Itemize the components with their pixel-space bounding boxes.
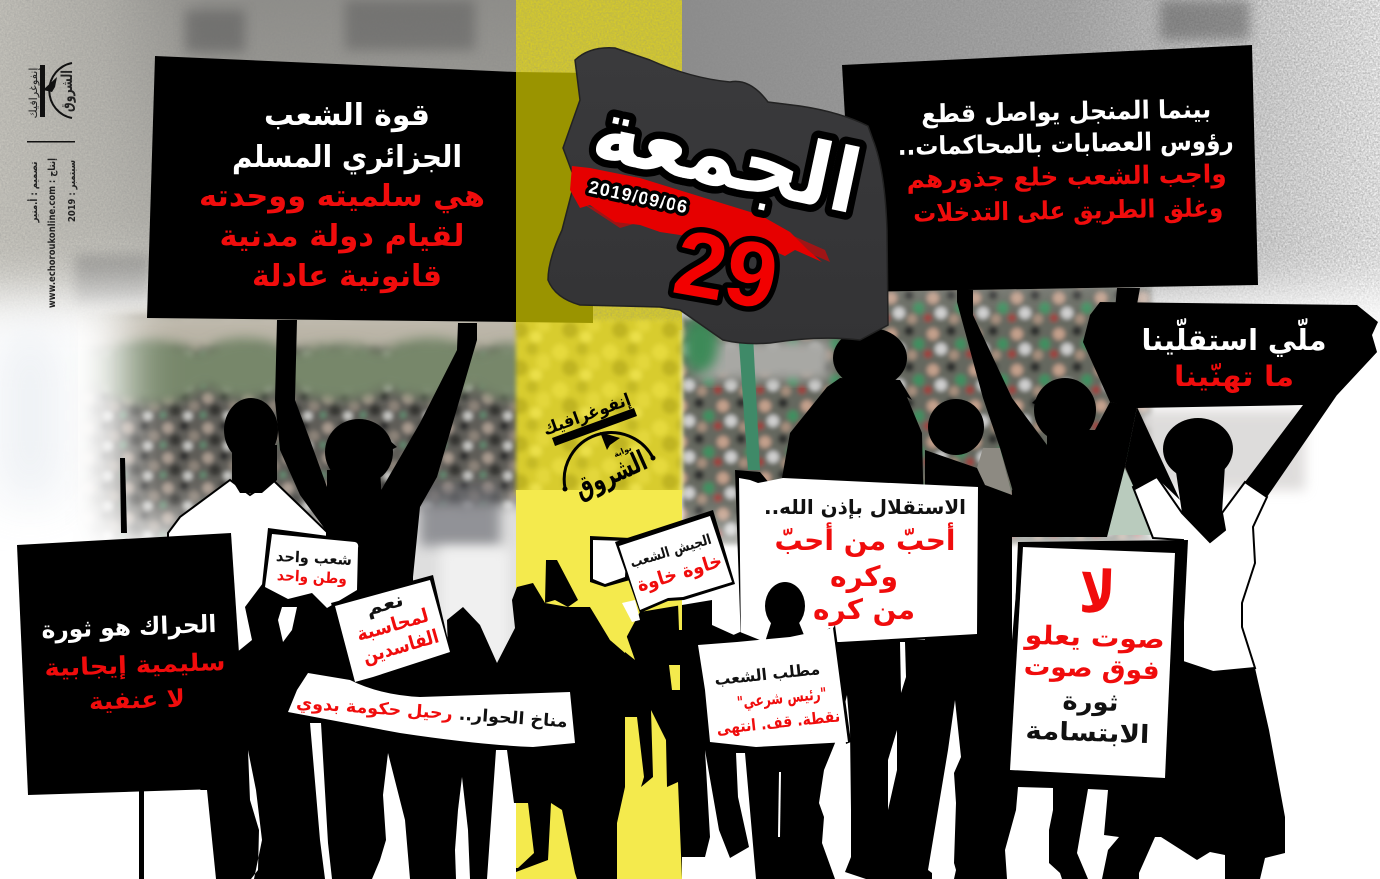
logo: centre infographic mark: إنفوغرافيك: [540, 390, 634, 440]
sign: independence by God's will: [735, 470, 978, 645]
sign: No voice above the voice: لا: [1078, 558, 1117, 627]
second head and body: [925, 399, 1012, 640]
date: 2019/09/06: [587, 177, 689, 217]
sign: No voice above the voice: ثورة: [1062, 686, 1119, 718]
side logo: إنفوغرافيك: [27, 68, 40, 118]
pole below board: [139, 788, 144, 879]
sign: army people brothers: خاوة خاوة: [634, 550, 725, 596]
sign: army people brothers: [590, 510, 735, 613]
scarf text: ملّي استقلّينا: [1142, 319, 1326, 357]
side logo: [27, 63, 76, 118]
yellow vertical band: [516, 0, 682, 879]
sign: yes to corrupt accountability: لمحاسبة: [354, 604, 431, 646]
sign: one people one nation: وطن واحد: [277, 566, 347, 588]
sign: No voice above the voice: فوق صوت: [1023, 652, 1160, 686]
logo: centre infographic mark: [540, 390, 656, 505]
panel: flag with event title: [548, 48, 888, 344]
background photo: buildings and crowd: [0, 0, 1380, 662]
sign: No voice above the voice: [1008, 540, 1188, 787]
white text block: رؤوس العصابات بالمحاكمات..: [897, 126, 1234, 162]
banner: dialogue climate: [288, 673, 575, 747]
red text block: واجب الشعب خلع جذورهم: [906, 159, 1227, 195]
flag pole: [737, 315, 760, 470]
red brush stroke: [570, 166, 830, 262]
white text block: [897, 94, 1234, 162]
panel: left top protest board: [147, 56, 593, 323]
logo: centre infographic mark: بوابة: [612, 443, 633, 459]
panel: bottom left black board: سليمية إيجابية: [44, 648, 226, 682]
white text block: بينما المنجل يواصل قطع: [921, 94, 1211, 130]
man in white shirt: [168, 398, 327, 665]
sign: independence by God's will: من كره: [813, 593, 915, 626]
sign: independence by God's will: وكره: [830, 560, 898, 593]
silhouettes: right group of protesters: [625, 288, 1377, 879]
red text block: [199, 179, 485, 294]
sign: No voice above the voice: صوت يعلو: [1022, 621, 1165, 656]
tall man centre right: [782, 328, 925, 520]
sign: yes to corrupt accountability: نعم: [363, 589, 406, 620]
sign pole: [120, 458, 127, 533]
man with cap raising arms: [275, 320, 477, 640]
sign: yes to corrupt accountability: [331, 575, 451, 684]
date credit: سبتمبر : 2019: [67, 160, 78, 222]
man with raised arms and cap: [957, 288, 1140, 537]
woman with white shirt: [1125, 352, 1377, 672]
credits column: [27, 63, 78, 308]
crowd mass bottom right: [625, 545, 1285, 879]
heading: people strength: الجزائري المسلم: [232, 140, 462, 175]
crowd mass bottom left: [200, 583, 640, 879]
yellow gaps between figures: [516, 590, 682, 879]
designer credit: تصميم : أ.منير: [27, 161, 40, 223]
white gaps between legs: [144, 600, 1225, 879]
number 29: 29: [667, 211, 785, 329]
scarf text: ما تهنّينا: [1174, 360, 1294, 393]
sign: people's demand with figure: [698, 582, 851, 747]
sign: people's demand with figure: مطلب الشعب: [714, 659, 821, 689]
side logo: الشروق: [58, 70, 76, 112]
panel: bottom left black board: الحراك هو ثورة: [41, 610, 217, 644]
red text block: لقيام دولة مدنية: [220, 219, 464, 254]
panel: scarf banner: [1083, 302, 1378, 408]
sign: yes to corrupt accountability: الفاسدين: [360, 625, 441, 668]
red text block: [906, 159, 1227, 229]
sign: independence by God's will: الاستقلال بإذن الله..: [764, 495, 966, 519]
title: الجمعة: [584, 77, 870, 234]
logo: centre infographic mark: الشروق: [569, 444, 652, 505]
sign: army people brothers: الجيش الشعب: [628, 532, 713, 572]
sign: people's demand with figure: "رئيس شرعي": [736, 684, 828, 713]
divider: [27, 141, 75, 142]
sign: independence by God's will: أحبّ من أحبّ: [774, 522, 956, 557]
silhouettes: left group of protesters: [120, 320, 640, 879]
heading: people strength: [232, 98, 462, 175]
banner: dialogue climate: مناخ الحوار.. رحيل حكومة بدوي: [296, 693, 568, 732]
panel: right top protest board: [842, 45, 1258, 292]
red text block: هي سلميته ووحدته: [199, 179, 485, 214]
panel: bottom left black board: لا عنفية: [88, 684, 185, 716]
red text block: وغلق الطريق على التدخلات: [913, 193, 1223, 229]
sign: one people one nation: [262, 528, 358, 608]
flag shape: [548, 48, 888, 344]
sign: No voice above the voice: الابتسامة: [1025, 716, 1150, 749]
scarf text: [1142, 319, 1326, 393]
website credit: إنتاج : www.echoroukonline.com: [47, 158, 58, 308]
sign: people's demand with figure: نقطة. قف. انتهى: [716, 706, 841, 738]
panel: bottom left black board: [17, 533, 248, 795]
heading: people strength: قوة الشعب: [264, 98, 430, 133]
sign: one people one nation: شعب واحد: [276, 547, 352, 569]
red text block: قانونية عادلة: [252, 259, 442, 294]
raised arm: [545, 560, 578, 607]
